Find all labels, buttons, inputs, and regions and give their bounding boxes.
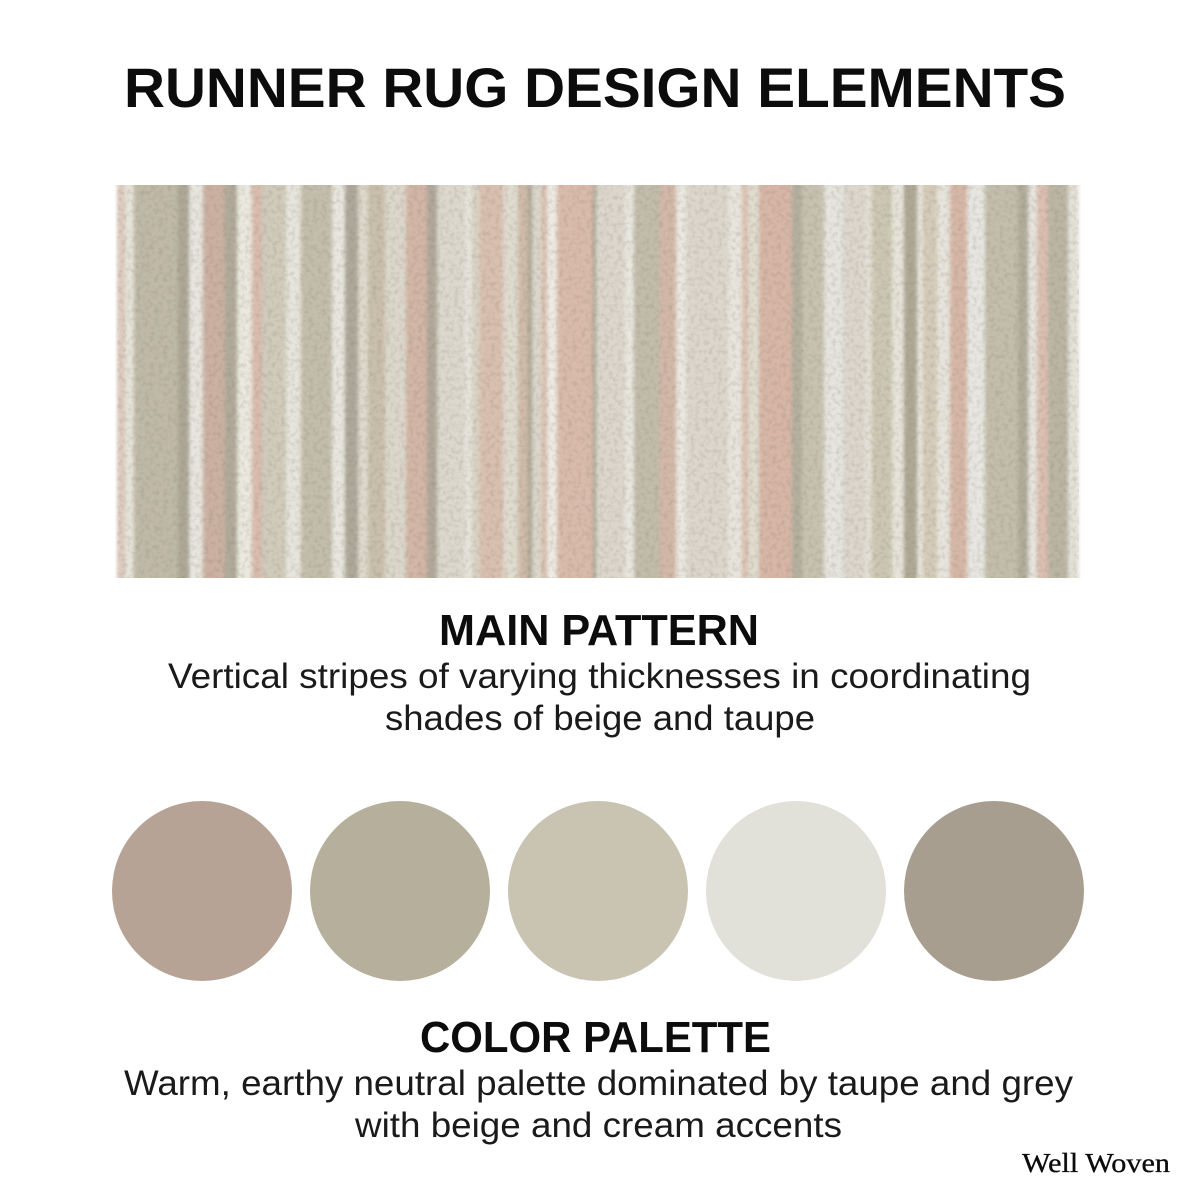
swatch: sage taupe <box>310 801 490 981</box>
heading: main pattern: MAIN PATTERN <box>439 606 759 655</box>
color palette description: with beige and cream accents <box>354 1106 842 1145</box>
swatch: cream grey <box>706 801 886 981</box>
swatch: taupe pink <box>112 801 292 981</box>
main pattern description: Vertical stripes of varying thicknesses in coordinating <box>168 657 1031 696</box>
swatch: beige <box>508 801 688 981</box>
color palette swatches <box>112 801 1084 981</box>
color palette description: Warm, earthy neutral palette dominated by taupe and grey <box>124 1064 1074 1103</box>
heading: color palette: COLOR PALETTE <box>420 1013 771 1062</box>
main pattern description <box>168 657 1031 738</box>
brand wordmark: Well Woven <box>1022 1148 1171 1178</box>
swatch: warm grey <box>904 801 1084 981</box>
title: RUNNER RUG DESIGN ELEMENTS <box>124 56 1066 119</box>
color palette description <box>124 1064 1074 1145</box>
striped rug pattern swatch <box>105 185 1094 578</box>
main pattern description: shades of beige and taupe <box>385 699 815 738</box>
